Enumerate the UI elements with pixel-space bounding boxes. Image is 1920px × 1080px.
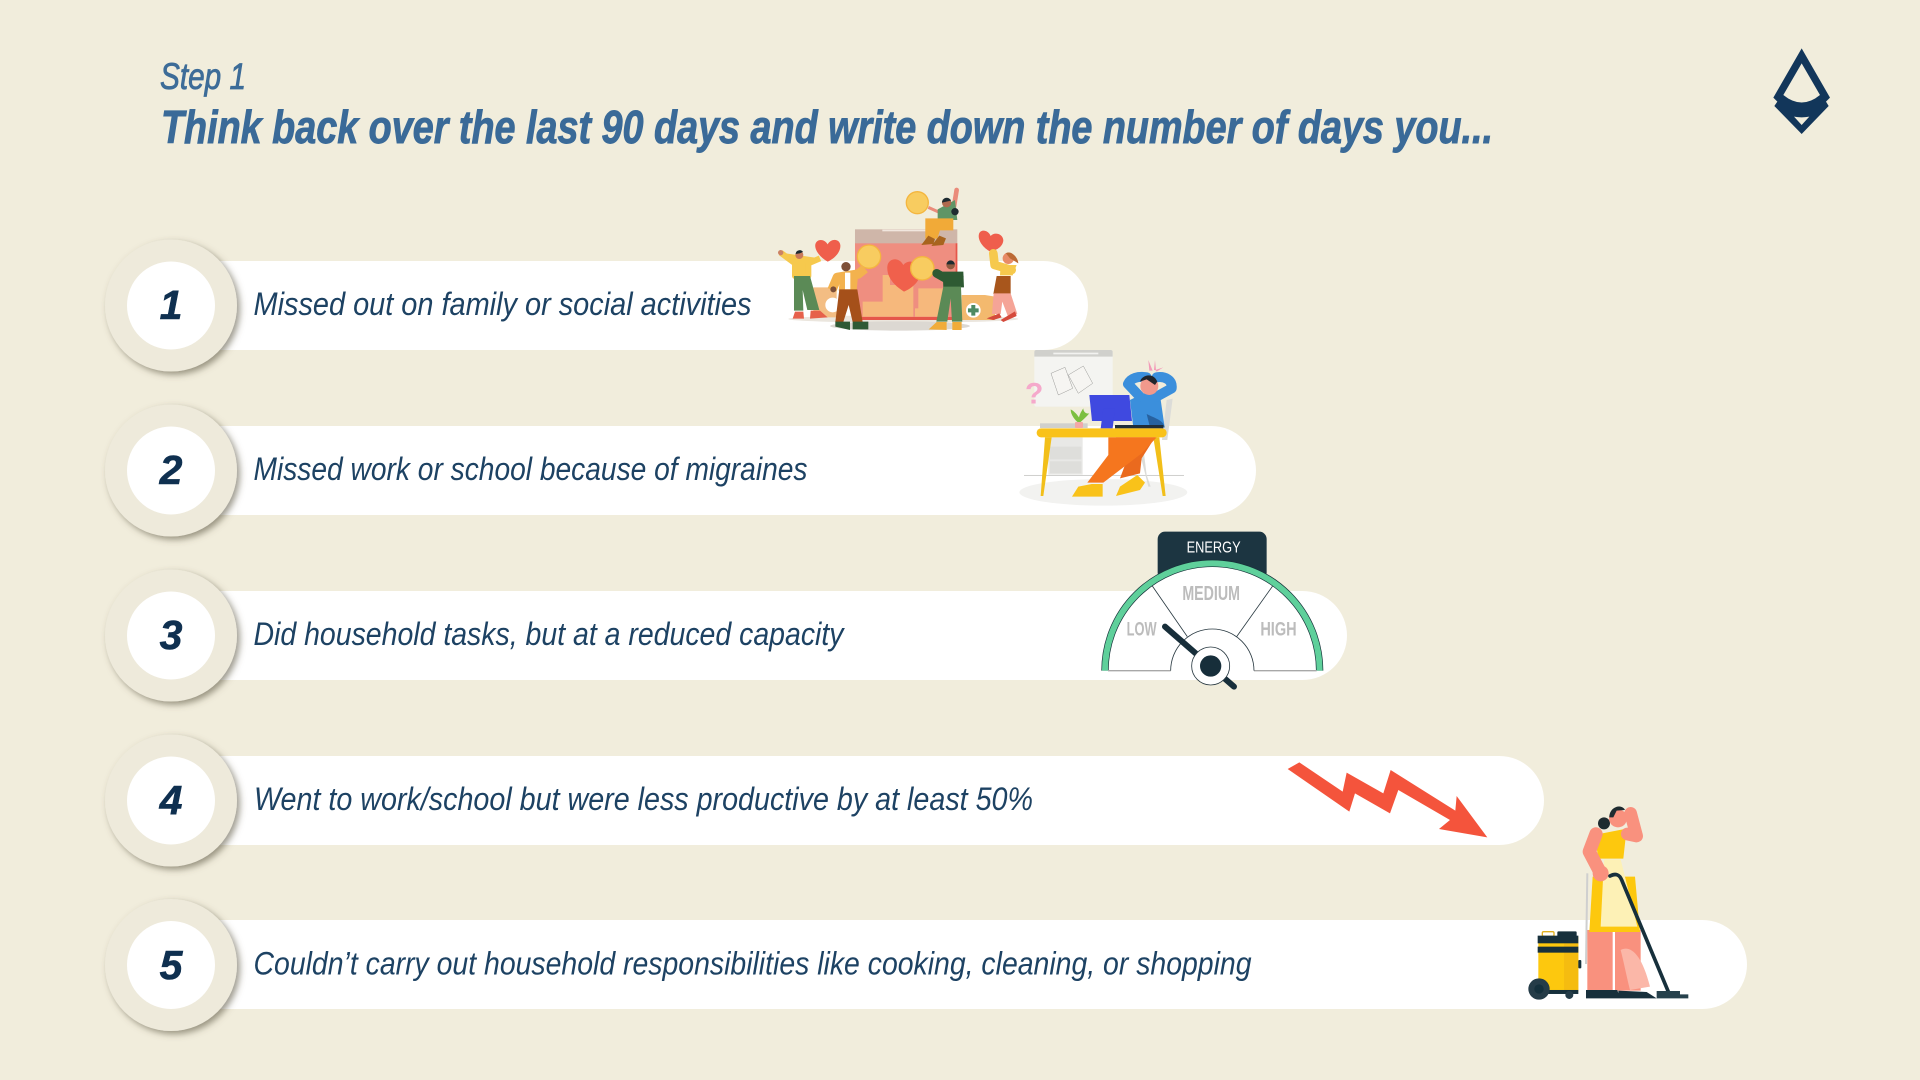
row text: Did household tasks, but at a reduced capacity	[254, 616, 845, 652]
chart: energy gauge	[1102, 532, 1323, 687]
header: step label and title	[160, 56, 1493, 153]
number badge	[105, 404, 237, 536]
illustration: tired woman vacuuming	[1528, 807, 1688, 1000]
number badge: 3	[160, 612, 183, 658]
gauge dial: LOW	[1127, 620, 1157, 641]
number badge: 2	[159, 447, 183, 493]
row text: Went to work/school but were less productive by at least 50%	[254, 781, 1033, 817]
gauge dial: HIGH	[1260, 620, 1297, 641]
number badge: 1	[160, 282, 182, 328]
gauge dial	[1102, 560, 1323, 687]
gauge tab: ENERGY	[1187, 539, 1241, 556]
illustration: people with hearts and donation jar	[778, 190, 1018, 331]
row text: Couldn’t carry out household responsibilities like cooking, cleaning, or shopping	[254, 946, 1252, 982]
number badge	[105, 899, 237, 1031]
row text: Missed out on family or social activities	[254, 286, 752, 322]
row 3: household tasks at reduced capacity	[105, 532, 1347, 702]
bar	[171, 261, 1088, 350]
icon: logo	[1773, 48, 1830, 134]
row 5: household responsibilities	[105, 807, 1747, 1031]
gauge dial: MEDIUM	[1182, 582, 1240, 605]
illustration: stressed person at desk	[1019, 350, 1187, 506]
number badge	[105, 570, 237, 702]
number badge	[105, 734, 237, 866]
arrow: red zigzag downward	[1288, 762, 1487, 837]
bar	[171, 920, 1747, 1009]
gauge tab	[1158, 532, 1267, 580]
number badge: 5	[160, 942, 184, 988]
row text: Missed work or school because of migraines	[254, 451, 808, 487]
row 4: less productive at work or school	[105, 734, 1544, 866]
illustration: stressed person at desk: ?	[1025, 377, 1043, 410]
number badge: 4	[159, 777, 183, 823]
number badge	[105, 240, 237, 372]
step label: Step 1	[160, 56, 246, 97]
title: Think back over the last 90 days and write down the number of days you...	[161, 101, 1493, 153]
bar	[171, 591, 1347, 680]
row 2: missed work or school	[105, 350, 1256, 536]
bar	[171, 426, 1256, 515]
row 1: family or social activities	[105, 190, 1088, 372]
bar	[171, 756, 1544, 845]
